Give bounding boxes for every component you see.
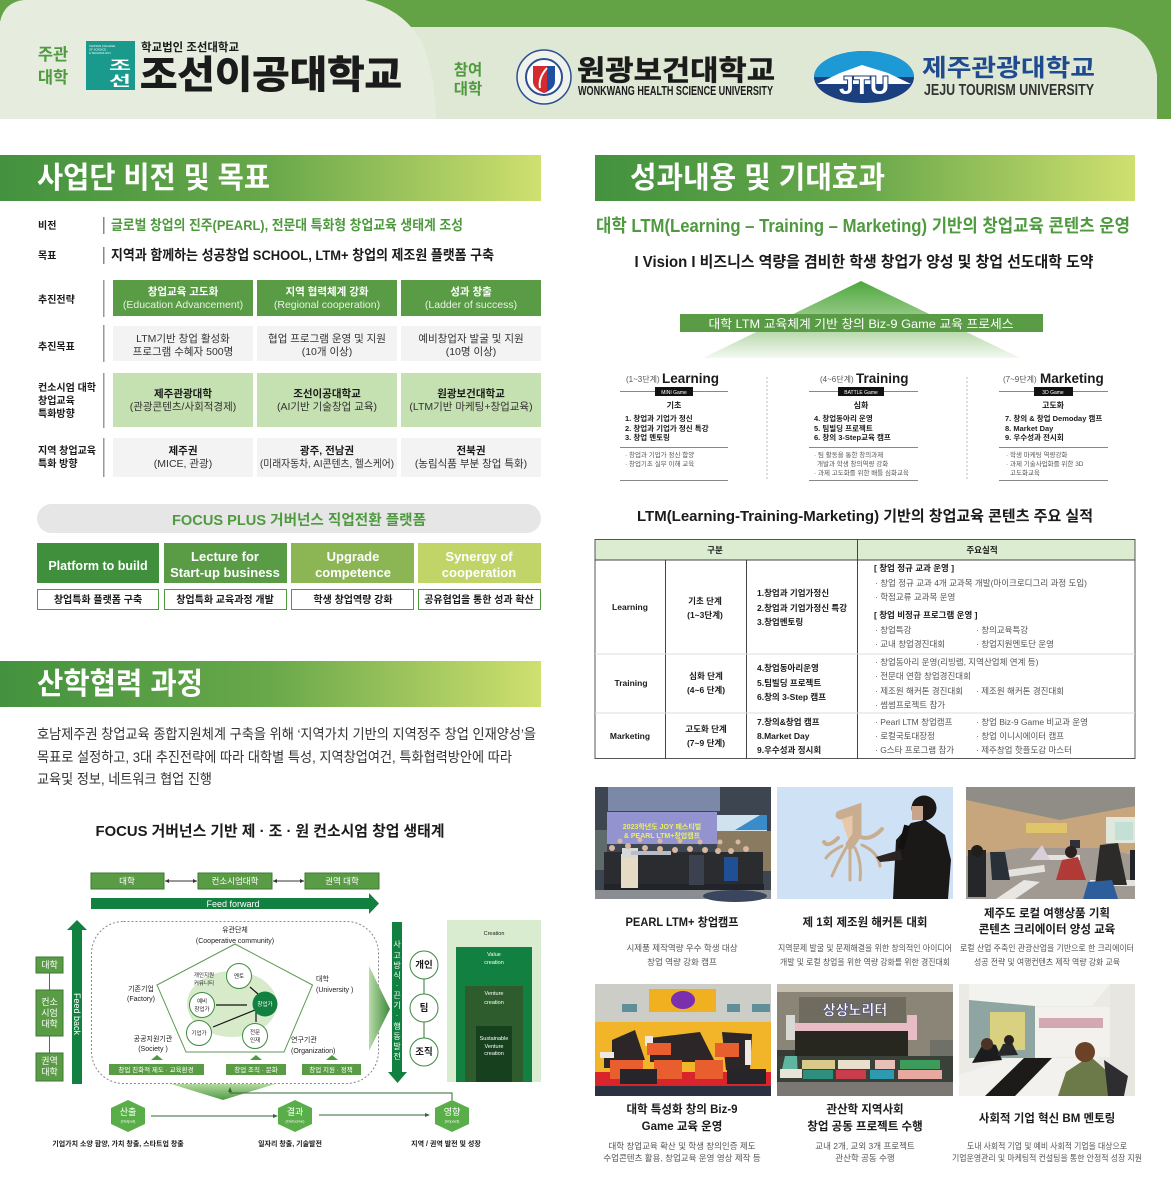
stage: learning: Learning (662, 371, 719, 386)
host university label (38, 45, 68, 87)
governance frame (92, 922, 378, 1084)
arrow: mindset development: 방 (393, 960, 401, 970)
stage: training: · 팀 활동을 통한 창의과제 (814, 450, 883, 459)
row: targets: 협업 프로그램 운영 및 지원 (268, 332, 386, 345)
host university label: 대학 (38, 68, 68, 87)
table row: training: · 창업동아리 운영(리빙랩, 지역산업체 연계 등) (875, 657, 1039, 667)
photo caption: joint project: 창업 공동 프로젝트 수행 (807, 1119, 923, 1133)
stakeholder labels: 유관단체 (222, 925, 248, 934)
table row: learning: 기초 단계 (688, 596, 722, 606)
logo: Wonkwang: 원광보건대학교 (577, 55, 775, 86)
arrow: mindset development: 전 (393, 1051, 401, 1061)
results table title: LTM(Learning-Training-Marketing) 기반의 창업교육 콘텐츠 주요 실적 (637, 508, 1093, 525)
row labels (38, 293, 96, 470)
results table (595, 539, 1135, 759)
stage: training (809, 371, 918, 480)
arrow: mindset development: 끈 (393, 991, 401, 1000)
individual team organisation: 조직 (415, 1046, 433, 1058)
arrow: feed forward (91, 893, 379, 914)
row: targets: LTM기반 창업 활성화 (136, 332, 230, 345)
pillar: upgrade (291, 543, 414, 610)
top university boxes: 컨소시엄대학 (212, 876, 259, 886)
stage: learning: 2. 창업과 기업가 정신 특강 (625, 423, 709, 433)
subtitle: 대학 LTM(Learning – Training – Marketing) 기반의 창업교육 콘텐츠 운영 (596, 216, 1130, 236)
logo: Chosun College (86, 40, 402, 97)
table row: training: · 썸썸프로젝트 참가 (875, 700, 945, 710)
governance frame: 기업가 (191, 1029, 207, 1037)
photo caption: Biz-9: 수업콘텐츠 활용, 창업교육 운영 영상 제작 등 (603, 1153, 761, 1163)
table row: marketing (610, 717, 1088, 755)
arrow: mindset development: 행 (393, 1021, 401, 1031)
pentagon (157, 944, 312, 1052)
row: specialisation: (AI기반 기술창업 교육) (277, 400, 377, 413)
table row: marketing: · 로컬국토대장정 (875, 731, 935, 741)
left university boxes: 대학 (41, 1067, 58, 1077)
photo caption: PEARL LTM camp: 시제품 제작역량 우수 학생 대상 (626, 943, 738, 953)
stakeholder labels: (Factory) (127, 996, 155, 1003)
stage: marketing: (7~9단계) (1003, 374, 1037, 384)
row: targets: (10개 이상) (302, 346, 352, 358)
process triangle (680, 281, 1043, 358)
photo caption: joint project: 관산학 지역사회 (826, 1102, 904, 1116)
governance frame: 예비 (197, 997, 207, 1005)
stage: learning: 기초 (667, 400, 682, 410)
table row: learning: · 학점교류 교과목 운영 (875, 592, 955, 602)
row: targets: 예비창업자 발굴 및 지원 (418, 332, 524, 345)
logo: Chosun College: 조선이공대학교 (140, 55, 402, 97)
platform pillars (37, 543, 541, 610)
table row: learning: · 창업지원멘토단 운영 (976, 639, 1054, 649)
table row: learning: [ 창업 정규 교과 운영 ] (874, 563, 954, 573)
stage columns (620, 371, 1108, 481)
stakeholder labels: (Society ) (138, 1046, 168, 1053)
photo caption: BM mentoring: 기업운영관리 및 마케팅적 컨설팅을 통한 안정적 성장 지원 (952, 1153, 1142, 1163)
table row: marketing: · G스타 프로그램 참가 (875, 745, 954, 755)
left university boxes (36, 957, 63, 1081)
stage: marketing: 고도화 (1042, 400, 1065, 410)
creation nested boxes: Venture (485, 1044, 503, 1050)
stage: training: (4~6단계) (820, 374, 854, 384)
row dividers (103, 280, 104, 477)
table row: learning: 2.창업과 기업가정신 특강 (757, 603, 847, 613)
support triangles (151, 1055, 338, 1060)
process paragraph (37, 726, 536, 787)
stakeholder labels: (Cooperative community) (196, 938, 274, 945)
participant label (454, 61, 482, 98)
table row: marketing: Marketing (610, 731, 650, 741)
table row: learning: [ 창업 비정규 프로그램 운영 ] (874, 610, 978, 620)
support boxes: 창업 지원 · 정책 (309, 1065, 353, 1074)
creation nested boxes: Creation (484, 931, 504, 937)
photo caption: PEARL LTM camp: PEARL LTM+ 창업캠프 (626, 915, 739, 929)
photo: PEARL LTM camp group: & PEARL LTM+창업캠프 (624, 831, 701, 840)
support boxes: 창업 조직 · 문화 (234, 1065, 278, 1074)
pillar: synergy: cooperation (442, 565, 516, 580)
row: specialisation: (LTM기반 마케팅+창업교육) (409, 400, 533, 413)
table row: marketing: · Pearl LTM 창업캠프 (875, 717, 953, 727)
pillar: lecture: Lecture for (191, 549, 259, 564)
process paragraph: 교육및 정보, 네트워크 협업 진행 (37, 771, 212, 787)
stage: marketing: 고도화교육 (1010, 469, 1040, 477)
table row: learning: · 교내 창업경진대회 (875, 639, 945, 649)
outcome hexagons (111, 1087, 469, 1132)
creation nested boxes: Venture (485, 991, 503, 997)
stage: training: 개발과 학생 창의역량 강화 (817, 459, 888, 468)
photo caption: Biz-9: 대학 특성화 창의 Biz-9 (626, 1102, 738, 1116)
vision statement: I Vision I 비즈니스 역량을 겸비한 학생 창업가 양성 및 창업 선도대학 도약 (634, 253, 1094, 271)
heading: results and expected effects: 성과내용 및 기대효과 (630, 162, 885, 195)
row labels: 추진전략 (38, 293, 75, 306)
arrow: feed back: Feed back (72, 993, 82, 1036)
photo caption: Jeju creator: 로컬 산업 주축인 관광산업을 기반으로 한 크리에이터 (960, 943, 1134, 953)
stakeholder labels: 기존기업 (128, 984, 154, 993)
row labels: 창업교육 (38, 394, 75, 407)
photo caption: hackathon: 지역문제 발굴 및 문제해결을 위한 창의적인 아이디어 (778, 943, 952, 953)
row: specialisation: 원광보건대학교 (437, 387, 505, 400)
stakeholder labels: 공공지원기관 (134, 1034, 173, 1043)
outcome captions: 일자리 창출, 기술발전 (258, 1139, 322, 1148)
stage: learning: (1~3단계) (626, 374, 660, 384)
row labels: 컨소시엄 대학 (38, 381, 96, 394)
left university boxes: 대학 (41, 960, 58, 970)
gradient triangles (369, 966, 390, 1051)
photo caption: BM mentoring: 사회적 기업 혁신 BM 멘토링 (979, 1111, 1115, 1125)
row: regions: (MICE, 관광) (154, 458, 212, 470)
arrow: mindset development: 동 (393, 1032, 401, 1041)
governance frame: 전문 (250, 1028, 260, 1036)
photo: social enterprise mentoring (959, 984, 1135, 1096)
strategy table (38, 280, 541, 477)
photo caption: joint project: 교내 2개, 교외 3개 프로젝트 (815, 1141, 915, 1151)
left university boxes: 시엄 (41, 1007, 58, 1018)
governance frame: 커뮤니티 (194, 979, 214, 987)
creation nested boxes: creation (484, 1051, 504, 1057)
stage: learning (620, 371, 728, 480)
stage: marketing: · 과제 기술사업화를 위한 3D (1006, 459, 1084, 468)
arrow: mindset development: 기 (393, 1001, 401, 1010)
left university boxes: 대학 (41, 1019, 58, 1029)
table row: training: Training (614, 678, 648, 688)
logo: Chosun College: & TECHNOLOGY (89, 51, 111, 55)
outcome hexagons: 결과 (287, 1107, 303, 1117)
participant label: 대학 (454, 80, 482, 98)
individual team organisation: 팀 (420, 1002, 428, 1014)
pillar: upgrade: competence (315, 565, 391, 580)
pillar: lecture (164, 543, 287, 610)
stage: learning: MINI Game (661, 390, 687, 396)
governance frame: 창업가 (257, 1000, 273, 1008)
arrow: mindset development: · (396, 1011, 398, 1020)
stakeholder labels: 연구기관 (291, 1035, 317, 1044)
row: strategies: 창업교육 고도화 (148, 285, 219, 298)
photo caption: joint project: 관산학 공동 수행 (835, 1153, 895, 1163)
table row: learning: Learning (612, 602, 648, 612)
row: targets: 프로그램 수혜자 500명 (133, 346, 233, 358)
pillar: lecture: Start-up business (170, 565, 280, 580)
vision and goal rows: 글로벌 창업의 진주(PEARL), 전문대 특화형 창업교육 생태계 조성 (111, 217, 463, 233)
row: regions: (미래자동차, AI콘텐츠, 헬스케어) (260, 458, 394, 470)
logo: Chosun College: OF SCIENCE (89, 48, 106, 52)
diagram title: FOCUS 거버넌스 기반 제 · 조 · 원 컨소시엄 창업 생태계 (96, 823, 444, 840)
root drawing (824, 809, 882, 880)
table row: learning: · 창업특강 (875, 625, 912, 635)
creation nested boxes: Value (487, 952, 501, 958)
top university boxes (91, 873, 379, 889)
vision and goal rows: 지역과 함께하는 성공창업 SCHOOL, LTM+ 창업의 제조원 플랫폼 구축 (111, 247, 494, 263)
stage: marketing: 9. 우수성과 전시회 (1005, 432, 1064, 442)
row labels: 추진목표 (38, 341, 75, 353)
table row: marketing: · 제주창업 핫플도감 마스터 (976, 745, 1072, 755)
stage: training: BATTLE Game (844, 390, 878, 396)
row labels: 특화 방향 (38, 457, 78, 470)
photo caption: Jeju creator (960, 906, 1134, 967)
outcome captions: 지역 / 권역 발전 및 성장 (411, 1139, 481, 1148)
logo: Jeju Tourism University: JTU (839, 72, 889, 100)
pillar: upgrade: 학생 창업역량 강화 (313, 593, 393, 606)
FOCUS PLUS pill: FOCUS PLUS 거버넌스 직업전환 플랫폼 (172, 512, 426, 529)
photo: hackathon speaker (777, 787, 953, 899)
photo caption: Biz-9: Game 교육 운영 (642, 1120, 722, 1133)
process paragraph: 목표로 설정하고, 3대 추진전략에 따라 대학별 특성, 지역창업여건, 특화협력방안에 따라 (37, 749, 512, 765)
process triangle: 대학 LTM 교육체계 기반 창의 Biz-9 Game 교육 프로세스 (708, 317, 1014, 331)
row: targets: (10명 이상) (446, 346, 496, 358)
host university label: 주관 (38, 45, 68, 64)
stage: training: 6. 창의 3-Step교육 캠프 (814, 432, 891, 442)
results table: 주요실적 (966, 545, 998, 555)
logo: Wonkwang (517, 50, 775, 104)
outcome hexagons: (Output) (121, 1118, 136, 1124)
photo: Sangsang Nori storefront: 상상노리터 (823, 1002, 887, 1018)
pillar: synergy: 공유협업을 통한 성과 확산 (424, 593, 534, 606)
creation nested boxes (447, 920, 541, 1082)
ecosystem diagram (36, 873, 541, 1148)
table row: training: · 전문대 연합 창업경진대회 (875, 671, 971, 681)
table row: marketing: 고도화 단계 (685, 724, 727, 734)
process paragraph: 호남제주권 창업교육 종합지원체계 구축을 위해 ‘지역가치 기반의 지역정주 창업 인재양성’을 (37, 726, 536, 742)
logo: Jeju Tourism University: JEJU TOURISM UNIVERSITY (924, 82, 1094, 99)
arrow: mindset development: 고 (393, 951, 401, 960)
heading: industry-academia process (0, 661, 541, 707)
stage: training: 4. 창업동아리 운영 (814, 413, 873, 423)
circle labels and arrows (213, 987, 258, 1027)
stakeholder labels: (University ) (316, 987, 353, 994)
arrow: mindset development: · (396, 981, 398, 990)
pillar: platform to build (37, 543, 159, 610)
heading: results and expected effects (595, 155, 1135, 201)
photo caption: PEARL LTM camp: 창업 역량 강화 캠프 (647, 957, 717, 967)
table row: training: (4~6 단계) (687, 685, 725, 695)
photo: Sangsang Nori storefront (777, 984, 953, 1096)
FOCUS PLUS pill (37, 504, 541, 533)
governance frame: 개인지원 (194, 971, 214, 979)
row: strategies: (Education Advancement) (123, 299, 243, 311)
pillar: synergy (418, 543, 541, 610)
individual team organisation (410, 951, 438, 1066)
table row: marketing: · 창업 이니시에이터 캠프 (976, 731, 1064, 741)
row: regions: 전북권 (457, 445, 485, 457)
results table: 구분 (707, 545, 723, 555)
photo caption: Jeju creator: 콘텐츠 크리에이터 양성 교육 (979, 922, 1116, 936)
photo caption: Jeju creator: 제주도 로컬 여행상품 기획 (984, 906, 1110, 920)
photo caption: joint project (807, 1102, 923, 1163)
vision and goal rows: 목표 (38, 250, 56, 262)
arrow: feed back (67, 920, 87, 1084)
pillar: lecture: 창업특화 교육과정 개발 (176, 593, 274, 606)
heading: industry-academia process: 산학협력 과정 (37, 668, 203, 701)
stakeholder labels: 대학 (316, 974, 329, 983)
table row: training: 심화 단계 (689, 671, 723, 681)
vision and goal rows: 비전 (38, 219, 56, 232)
photo caption: BM mentoring: 도내 사회적 기업 및 예비 사회적 기업을 대상으로 (967, 1141, 1127, 1151)
stage: training: 심화 (854, 400, 869, 410)
top university boxes: 권역 대학 (325, 876, 359, 886)
logo: Chosun College: CHOSUN COLLEGE (89, 44, 115, 48)
logo: Chosun College: 선 (109, 73, 131, 89)
stage: marketing: 7. 창의 & 창업 Demoday 캠프 (1005, 413, 1102, 423)
row: regions: 광주, 전남권 (300, 444, 354, 457)
left university boxes: 컨소 (41, 997, 58, 1007)
creation nested boxes: creation (484, 960, 504, 966)
logo: Wonkwang: WONKWANG HEALTH SCIENCE UNIVERSITY (578, 83, 773, 98)
row: targets (113, 326, 541, 361)
stage: marketing: 3D Game (1042, 390, 1064, 396)
outcome hexagons: 산출 (120, 1107, 136, 1117)
row labels: 지역 창업교육 (38, 444, 96, 457)
stage: learning: 3. 창업 멘토링 (625, 432, 670, 442)
photo caption: Biz-9: 대학 창업교육 확산 및 학생 창의인증 제도 (608, 1141, 756, 1151)
arrow: mindset development (388, 922, 407, 1083)
photo caption: Jeju creator: 성공 전략 및 여행컨텐츠 제작 역량 강화 교육 (974, 957, 1120, 967)
logo: Jeju Tourism University: 제주관광대학교 (922, 55, 1095, 82)
row: specialisation: 조선이공대학교 (293, 387, 361, 400)
outcome captions: 기업가치 소양 함양, 가치 창출, 스타트업 창출 (52, 1139, 184, 1148)
pillar: upgrade: Upgrade (327, 549, 379, 564)
photo: Biz-9 stage (595, 984, 771, 1096)
outcome hexagons: (Outcome) (286, 1118, 305, 1124)
table row: learning (612, 563, 1087, 649)
table row: marketing: 7.창의&창업 캠프 (757, 717, 820, 727)
table row: training: 4.창업동아리운영 (757, 663, 819, 673)
heading: vision and goals (0, 155, 541, 201)
outcome hexagons: 영향 (444, 1106, 460, 1117)
arrow: mindset development: 식 (393, 971, 401, 980)
stage: learning: · 창업기초 실무 이해 교육 (625, 459, 694, 468)
photo caption: hackathon: 개발 및 로컬 창업을 위한 역량 강화를 위한 경진대회 (780, 957, 950, 967)
stage: marketing (999, 371, 1108, 480)
table row: learning: · 창업 정규 교과 4개 교과목 개발(마이크로디그리 과정 도입) (875, 578, 1087, 588)
governance frame: 멘토 (234, 972, 244, 980)
vision and goal rows (38, 217, 494, 264)
pillar: platform to build: Platform to build (48, 559, 148, 573)
photo caption: hackathon (778, 915, 952, 967)
table row: training: 5.팀빌딩 프로젝트 (757, 678, 821, 688)
table row: training: · 제조원 해커톤 경진대회 (976, 686, 1064, 696)
stage: marketing: · 학생 마케팅 역량강화 (1006, 450, 1067, 459)
stakeholder labels: (Organization) (291, 1048, 335, 1055)
table row: marketing: · 창업 Biz-9 Game 비교과 운영 (976, 717, 1088, 727)
support boxes: 창업 친화적 제도 · 교육환경 (118, 1065, 194, 1074)
arrow: mindset development: 사 (393, 940, 401, 949)
photo caption: hackathon: 제 1회 제조원 해커톤 대회 (803, 915, 927, 929)
outcome captions (52, 1139, 481, 1148)
photo: PEARL LTM camp group: 2023학년도 JOY 페스티벌 (623, 822, 701, 831)
table row: marketing: (7~9 단계) (687, 738, 725, 748)
table row: learning: (1~3단계) (687, 610, 723, 620)
support boxes (109, 1064, 361, 1075)
stakeholder labels (127, 925, 353, 1055)
governance frame: 인재 (250, 1036, 260, 1044)
row: strategies: 지역 협력체계 강화 (285, 285, 369, 298)
stage: learning: 1. 창업과 기업가 정신 (625, 413, 693, 423)
stage: marketing: Marketing (1040, 371, 1104, 386)
row: regions (113, 438, 541, 477)
arrow: feed forward: Feed forward (206, 899, 260, 909)
table row: marketing: 8.Market Day (757, 731, 810, 741)
outcome hexagons: (Impact) (445, 1118, 460, 1124)
row: specialisation: 제주관광대학 (154, 387, 212, 400)
stage: training: · 과제 고도화를 위한 배틀 심화교육 (814, 468, 909, 477)
stage: training: 5. 팀빌딩 프로젝트 (814, 423, 873, 433)
header banner (0, 0, 1171, 119)
top university boxes: 대학 (119, 876, 135, 886)
logo: Chosun College: 조 (109, 58, 131, 73)
table row: learning: 3.창업멘토링 (757, 617, 803, 627)
row: strategies: 성과 창출 (450, 285, 492, 298)
row labels: 특화방향 (38, 407, 75, 420)
logo: Jeju Tourism University (814, 51, 1095, 103)
row: specialisation (113, 373, 541, 427)
stage: marketing: 8. Market Day (1005, 424, 1054, 433)
logo: Chosun College: 학교법인 조선대학교 (141, 40, 239, 54)
stage: learning: · 창업과 기업가 정신 함양 (625, 450, 694, 459)
photo caption: BM mentoring (952, 1111, 1142, 1163)
row: strategies: (Ladder of success) (425, 299, 517, 311)
table row: training (614, 657, 1064, 710)
creation nested boxes: Sustainable (480, 1036, 508, 1042)
table row: marketing: 9.우수성과 정시회 (757, 745, 821, 755)
photo caption: PEARL LTM camp (626, 915, 739, 967)
photo caption: Biz-9 (603, 1102, 761, 1163)
individual team organisation: 개인 (415, 959, 433, 971)
row: regions: 제주권 (169, 444, 197, 457)
photo: Jeju creator class (966, 787, 1135, 899)
pillar: synergy: Synergy of (445, 549, 513, 564)
table row: training: 6.창의 3-Step 캠프 (757, 692, 826, 702)
row: specialisation: (관광콘텐츠/사회적경제) (130, 400, 236, 413)
creation nested boxes: creation (484, 1000, 504, 1006)
photo: PEARL LTM camp group (595, 787, 771, 902)
heading: vision and goals: 사업단 비전 및 목표 (37, 162, 270, 195)
left university boxes: 권역 (41, 1055, 58, 1066)
pillar: platform to build: 창업특화 플랫폼 구축 (54, 593, 142, 606)
arrow: mindset development: 발 (393, 1041, 401, 1051)
stage: training: Training (856, 371, 909, 386)
participant label: 참여 (454, 61, 482, 79)
row: strategies: (Regional cooperation) (274, 299, 380, 311)
crowd (604, 852, 763, 884)
table row: training: · 제조원 해커톤 경진대회 (875, 686, 963, 696)
row: strategies (113, 280, 541, 316)
table row: learning: 1.창업과 기업가정신 (757, 588, 829, 598)
governance frame: 창업가 (194, 1005, 210, 1013)
row: regions: (농림식품 부분 창업 특화) (415, 457, 527, 470)
table row: learning: · 창의교육특강 (976, 625, 1028, 635)
